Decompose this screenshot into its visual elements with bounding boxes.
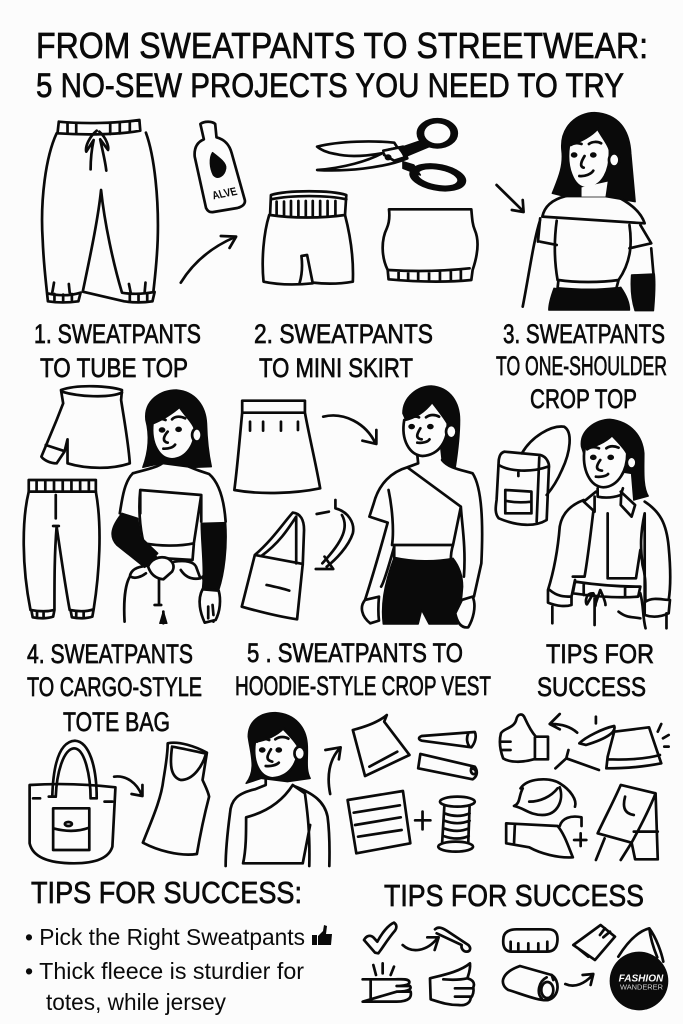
icon: fabric rolls — [418, 732, 477, 779]
logo: fashion wanderer: FASHION — [619, 974, 664, 985]
icon: folded sleeve — [506, 817, 582, 857]
icon: rolled fabric — [503, 966, 558, 1000]
heading: project 3 — [496, 319, 667, 414]
heading: project 5: HOODIE-STYLE CROP VEST — [235, 671, 491, 701]
arrow — [565, 974, 593, 986]
illustration: woman in tube top and black sleeves — [112, 390, 226, 623]
icon: safety pin — [435, 928, 470, 952]
heading: project 2: 2. SWEATPANTS — [254, 319, 433, 349]
tips text block: totes, while jersey — [46, 989, 226, 1015]
heading: project 4 — [27, 639, 202, 737]
icon: folded shorts — [596, 785, 658, 860]
icon: sweatpants — [24, 480, 100, 618]
icon: mini skirt — [234, 401, 320, 493]
heading: tips for success — [537, 639, 654, 702]
icon: backpack — [496, 427, 570, 525]
logo: fashion wanderer — [610, 928, 668, 1010]
arrow — [181, 236, 236, 283]
icon: scissors — [317, 119, 469, 195]
heading: tips list: TIPS FOR SUCCESS: — [31, 875, 302, 910]
icon: pattern sheet — [348, 791, 410, 853]
heading: project 2: TO MINI SKIRT — [259, 353, 413, 383]
heading: project 5: 5 . SWEATPANTS TO — [247, 638, 463, 668]
arrow — [403, 937, 439, 950]
arrow — [550, 714, 577, 733]
heading: project 2 — [254, 319, 433, 383]
heading: project 4: 4. SWEATPANTS — [27, 639, 193, 669]
icon: check mark — [364, 923, 396, 953]
row 4 icons — [363, 923, 668, 1010]
icon: glue bottle: ALVE — [210, 185, 239, 202]
heading: project 5 — [235, 638, 491, 701]
icon: sweatpants — [42, 120, 158, 302]
icon: glue bottle — [195, 122, 245, 212]
arrow: curved down — [316, 500, 353, 569]
icon: measuring band — [503, 929, 557, 952]
arrow — [325, 747, 341, 794]
plus sign — [415, 812, 430, 829]
icon: small thumbs up — [312, 925, 332, 945]
tips text block: • Thick fleece is sturdier for — [25, 958, 304, 984]
icon: cargo tote bag — [30, 741, 115, 863]
plus sign — [574, 833, 586, 846]
arrow — [323, 416, 376, 444]
icon: tank top — [143, 743, 209, 855]
illustration: woman in cropped jacket — [548, 419, 670, 628]
illustration: woman in one-shoulder crop top — [362, 386, 482, 627]
row 2 illustrations — [24, 386, 670, 628]
icon: tote bag — [242, 513, 304, 619]
icon: open hand — [430, 963, 474, 1005]
heading: project 1: TO TUBE TOP — [40, 353, 188, 383]
row 3 illustrations — [30, 713, 669, 866]
title — [36, 25, 648, 105]
icon: shorts — [41, 386, 130, 468]
tips text block — [25, 924, 305, 1015]
row 1 illustrations — [42, 113, 655, 311]
icon: cut fabric — [353, 715, 409, 776]
heading: project 4: TO CARGO-STYLE — [27, 672, 202, 702]
logo: fashion wanderer: WANDERER — [620, 984, 663, 991]
icon: tube skirt — [383, 209, 478, 282]
icon: sleeve cuff — [363, 963, 411, 1002]
icon: cropped shorts — [263, 191, 353, 284]
heading: tips icons: TIPS FOR SUCCESS — [384, 878, 644, 913]
tips text block: • Pick the Right Sweatpants — [25, 924, 305, 950]
icon: thumbs up — [500, 714, 548, 762]
heading: tips for success: SUCCESS — [537, 672, 646, 702]
heading: project 4: TOTE BAG — [63, 707, 170, 737]
arrow — [114, 776, 142, 796]
heading: project 3: CROP TOP — [530, 384, 637, 414]
arrow — [497, 185, 524, 212]
heading: tips for success: TIPS FOR — [546, 639, 654, 669]
heading: project 1 — [34, 319, 201, 383]
illustration: woman in one-shoulder top — [226, 713, 330, 866]
icon: fabric swatch — [573, 925, 615, 960]
illustration: woman in off-shoulder top — [523, 113, 655, 311]
icon: thread spool — [438, 797, 475, 852]
icon: marking pencil on skirt — [555, 717, 669, 770]
heading: project 1: 1. SWEATPANTS — [34, 319, 201, 349]
icon: draped hood — [514, 779, 575, 815]
